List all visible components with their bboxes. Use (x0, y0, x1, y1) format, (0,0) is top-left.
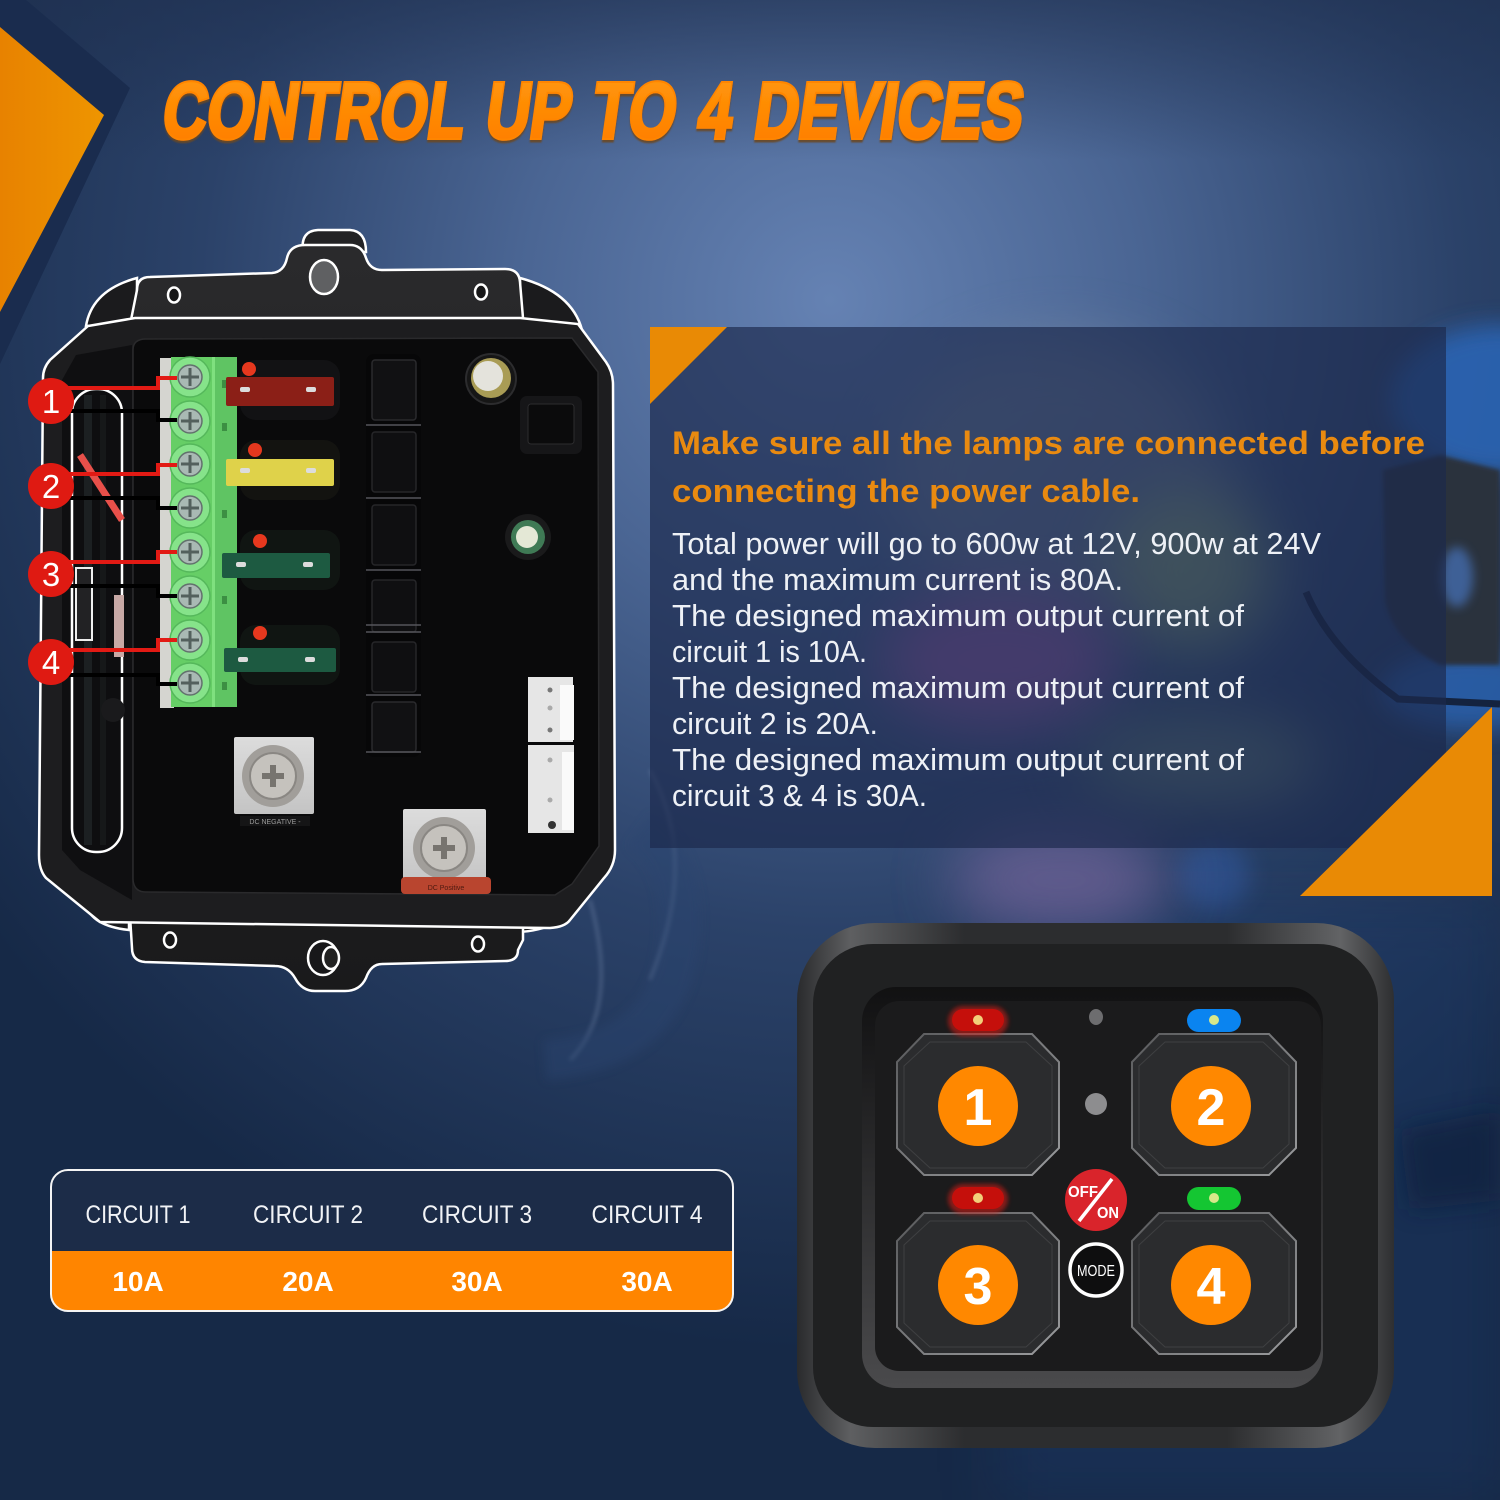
table: circuit headers: CIRCUIT 4 (592, 1201, 703, 1229)
off/on button: ON (1097, 1205, 1119, 1222)
control box: mounting plate (129, 245, 523, 991)
button 2: 2 (1197, 1079, 1225, 1137)
mode button (1070, 1244, 1122, 1296)
control box: left slot (72, 389, 125, 852)
table: circuit current ratings (51, 1170, 733, 1311)
table: circuit headers: CIRCUIT 2 (253, 1201, 363, 1229)
button 1: 1 (964, 1079, 992, 1137)
callout number 1 (28, 378, 74, 424)
control box: inductors (366, 354, 582, 757)
control box: housing (39, 318, 615, 928)
table: current values: 30A (451, 1266, 503, 1297)
switch panel: outer bezel (797, 923, 1394, 1448)
table: current values (112, 1266, 673, 1297)
table: circuit headers (86, 1201, 703, 1229)
text block: circuit current specs: Total power will go to 600w at 12V, 900w at 24V (672, 526, 1321, 561)
sensor dots (1085, 1009, 1107, 1115)
text block: circuit current specs: The designed maximum output current of (672, 742, 1244, 777)
control box: positive terminal lug (401, 809, 491, 894)
control box: mounting holes (164, 260, 487, 975)
heading: connection warning: Make sure all the lamps are connected before (672, 425, 1425, 461)
callout number 1: 1 (42, 383, 60, 420)
text block: circuit current specs: circuit 1 is 10A. (672, 634, 867, 669)
LED indicator 2: blue (1187, 1009, 1241, 1032)
switch panel: recess (862, 987, 1323, 1388)
callout leaders: positive and negative wires (68, 378, 177, 684)
table: current values: 10A (112, 1266, 164, 1297)
decorative left chevron in orange and navy (0, 0, 130, 364)
callout number 2: 2 (42, 468, 60, 505)
switch panel (797, 923, 1394, 1448)
control box: potting compound (133, 338, 599, 895)
text block: circuit current specs: The designed maximum output current of (672, 670, 1244, 705)
table: current values: 20A (282, 1266, 334, 1297)
heading: connection warning: connecting the power cable. (672, 473, 1140, 509)
off/on button (1065, 1169, 1127, 1231)
text block: circuit current specs: and the maximum current is 80A. (672, 562, 1123, 597)
text block: circuit current specs: circuit 2 is 20A. (672, 706, 878, 741)
button 2 (1132, 1034, 1296, 1175)
title: CONTROL UP TO 4 DEVICES (157, 66, 1030, 156)
table: circuit headers: CIRCUIT 3 (422, 1201, 532, 1229)
control box: negative terminal lug: DC NEGATIVE - (249, 819, 301, 826)
control box: capacitors (466, 354, 551, 560)
heading: connection warning (672, 425, 1425, 509)
LED indicator 1: red (948, 1006, 1008, 1036)
text block: circuit current specs (672, 526, 1321, 813)
table: orange value band (51, 1251, 733, 1311)
callout number 3: 3 (42, 556, 60, 593)
control box: positive terminal lug: DC Positive (428, 885, 464, 892)
table: current values: 30A (621, 1266, 673, 1297)
panel corner accent: bottom right orange triangle (1300, 707, 1492, 896)
button 3 (897, 1213, 1059, 1354)
callout number 4 (28, 639, 74, 685)
callout number 4: 4 (42, 644, 60, 681)
LED indicator 4: green (1187, 1187, 1241, 1210)
button 1 (897, 1034, 1059, 1175)
text block: circuit current specs: The designed maximum output current of (672, 598, 1244, 633)
panel corner accent: top left (650, 327, 727, 404)
control box: green terminal block (160, 357, 237, 708)
callout number 2 (28, 463, 74, 509)
LED indicator 3: red (948, 1184, 1008, 1214)
mode button: MODE (1077, 1263, 1115, 1280)
switch panel: housing face (813, 944, 1378, 1427)
button 4: 4 (1197, 1258, 1226, 1316)
table: circuit headers: CIRCUIT 1 (86, 1201, 190, 1229)
control box photo with white outline (39, 230, 615, 991)
control box: white connectors (528, 677, 574, 833)
button 4 (1132, 1213, 1296, 1354)
callout number 3 (28, 551, 74, 597)
panel: power information (650, 327, 1446, 848)
button 3: 3 (964, 1258, 992, 1316)
control box: fuses and LEDs (222, 360, 340, 685)
off/on button: OFF (1068, 1184, 1098, 1201)
control box: negative terminal lug (234, 737, 314, 826)
control box: top tab and ears (303, 230, 366, 252)
text block: circuit current specs: circuit 3 & 4 is 30A. (672, 778, 927, 813)
